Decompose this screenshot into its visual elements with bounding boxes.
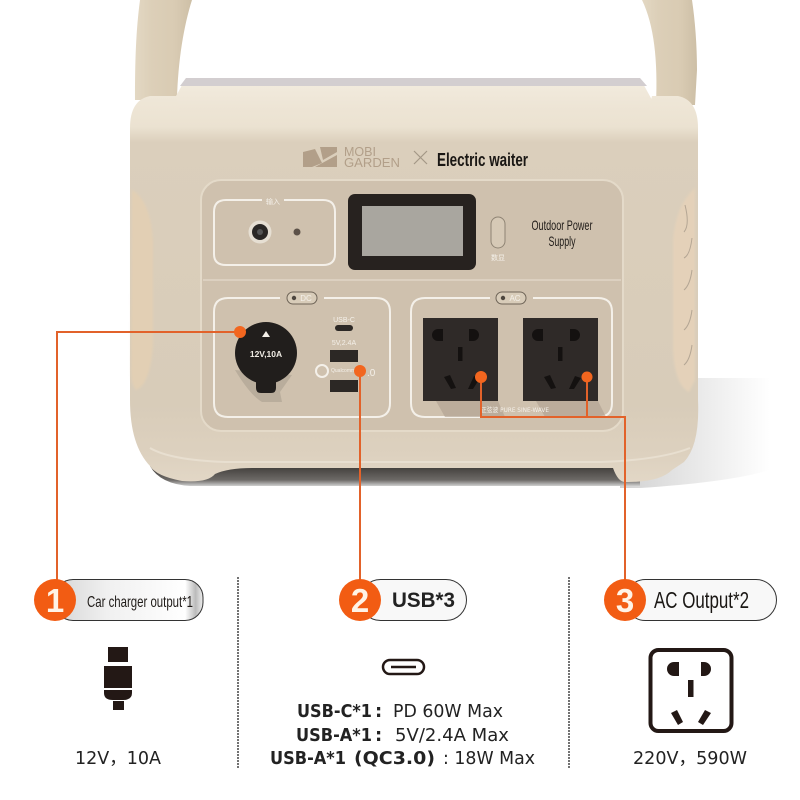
spec list: USB bbox=[270, 701, 535, 769]
LCD screen bbox=[348, 194, 476, 270]
DC output box bbox=[214, 292, 390, 417]
callout lines bbox=[57, 332, 625, 590]
heading pill 3: 3 bbox=[616, 582, 634, 619]
product label: Outdoor Power bbox=[532, 217, 593, 233]
spec: AC: 220V，590W bbox=[633, 748, 747, 769]
main body bbox=[130, 96, 698, 482]
carry handle bbox=[135, 0, 697, 105]
spec list: USB: USB-A*1 bbox=[296, 725, 372, 746]
input port box: 输入 bbox=[266, 197, 280, 206]
control panel bbox=[201, 180, 623, 431]
spec list: USB: : bbox=[375, 701, 382, 722]
AC output box bbox=[411, 292, 612, 417]
product label: Supply bbox=[548, 233, 576, 249]
car charger socket: 12V,10A bbox=[250, 349, 282, 359]
car charger socket bbox=[235, 322, 297, 402]
USB ports: 5V,2.4A bbox=[332, 340, 356, 347]
column divider left bbox=[237, 577, 239, 768]
spec list: USB: PD 60W Max bbox=[393, 701, 503, 722]
spec list: USB: USB-C*1 bbox=[297, 701, 372, 722]
AC socket right bbox=[523, 318, 598, 401]
icon: AC socket bbox=[650, 650, 732, 731]
column 2: USB bbox=[270, 579, 535, 769]
spec list: USB: : bbox=[375, 725, 382, 746]
brand logo bbox=[303, 144, 528, 170]
top lid bbox=[176, 78, 652, 115]
AC output box: AC bbox=[509, 294, 521, 303]
heading pill 2 bbox=[339, 579, 466, 621]
heading pill 1: Car charger output*1 bbox=[87, 594, 193, 611]
side grips bbox=[131, 188, 695, 392]
spec list: USB: 5V/2.4A Max bbox=[395, 725, 509, 746]
heading pill 3 bbox=[604, 579, 776, 621]
sine wave label: 正弦波 PURE SINE-WAVE bbox=[481, 405, 549, 414]
heading pill 2: 2 bbox=[351, 582, 369, 619]
USB ports: Qualcomm bbox=[331, 368, 355, 374]
heading pill 1 bbox=[34, 579, 203, 621]
column 3: AC bbox=[604, 579, 776, 769]
input port box bbox=[214, 197, 335, 265]
icon: USB-C port bbox=[383, 660, 424, 674]
display button: 数显 bbox=[491, 253, 505, 262]
brand logo: MOBI bbox=[344, 144, 376, 159]
brand logo: GARDEN bbox=[344, 155, 400, 170]
AC socket left bbox=[423, 318, 498, 401]
display button bbox=[491, 217, 505, 262]
heading pill 3: AC Output*2 bbox=[654, 587, 749, 613]
spec: car charger: 12V，10A bbox=[75, 748, 162, 769]
spec list: USB: (QC3.0) bbox=[354, 748, 435, 769]
callout dots bbox=[234, 326, 592, 383]
heading pill 1: 1 bbox=[46, 582, 64, 619]
column divider right bbox=[568, 577, 570, 768]
heading pill 2: USB*3 bbox=[392, 589, 455, 612]
USB ports: .0 bbox=[367, 368, 376, 379]
DC output box: DC bbox=[300, 294, 312, 303]
brand logo: Electric waiter bbox=[437, 150, 528, 170]
USB ports bbox=[316, 317, 376, 392]
spec list: USB: USB-A*1 bbox=[270, 748, 346, 769]
ground shadow bbox=[150, 378, 770, 488]
product label bbox=[532, 217, 593, 249]
icon: car charger plug bbox=[104, 647, 132, 710]
column 1: car charger bbox=[34, 579, 203, 769]
spec list: USB: : 18W Max bbox=[443, 748, 535, 769]
power station product bbox=[130, 0, 770, 488]
USB ports: USB-C bbox=[333, 317, 355, 324]
base line highlight bbox=[150, 448, 690, 462]
